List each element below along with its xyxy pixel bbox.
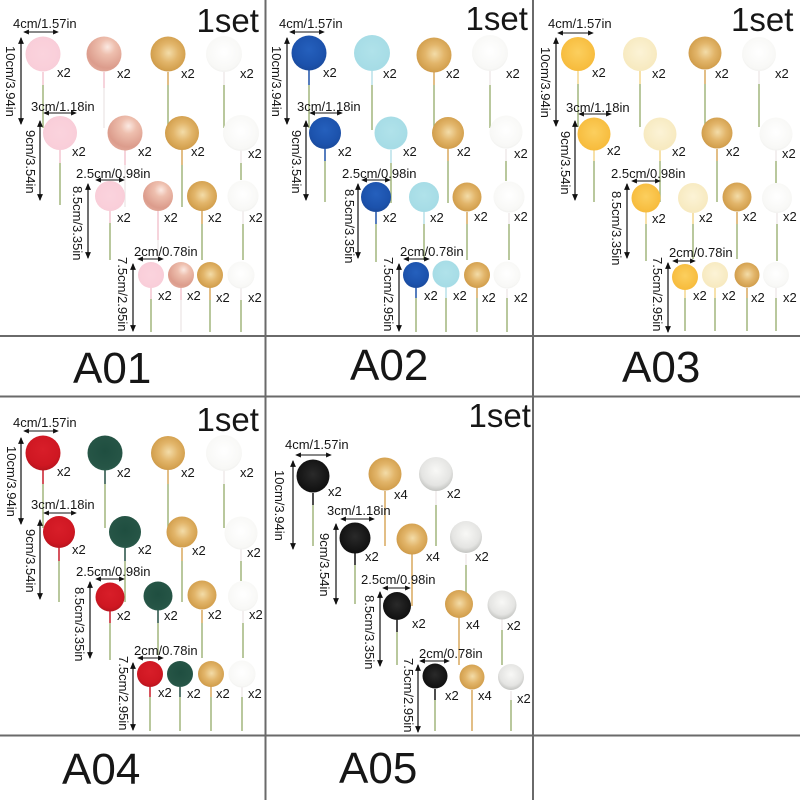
dimensions A04: 2.5cm/0.98in <box>76 564 150 579</box>
dimensions A02 <box>269 16 464 331</box>
balls A01 row 3 <box>95 180 258 212</box>
quantities A01: x2 <box>187 288 201 303</box>
quantities A01: x2 <box>72 144 86 159</box>
stems A02 <box>309 70 416 298</box>
quantities A01: x2 <box>117 210 131 225</box>
quantities A05: x2 <box>517 691 531 706</box>
quantities A05: x4 <box>466 617 480 632</box>
dimensions A04: 9cm/3.54in <box>23 529 38 593</box>
dimensions A02: 2.5cm/0.98in <box>342 166 416 181</box>
quantities A03: x2 <box>715 66 729 81</box>
dimensions A02: 3cm/1.18in <box>297 99 361 114</box>
dimensions A01: 10cm/3.94in <box>3 46 18 117</box>
quantities A01: x2 <box>208 210 222 225</box>
balls A01 row 2 <box>43 115 259 151</box>
quantities A02: x2 <box>403 144 417 159</box>
quantities A01: x2 <box>138 144 152 159</box>
dimensions A05: 7.5cm/2.95in <box>401 658 416 732</box>
panel: A04 <box>4 401 263 794</box>
dimensions A05: 3cm/1.18in <box>327 503 391 518</box>
balls A03 row 3 <box>632 182 792 213</box>
panel: A01 <box>3 2 263 393</box>
balls A04 row 2 <box>43 516 258 550</box>
quantities A04: x2 <box>247 545 261 560</box>
balls A02 row 1 <box>292 35 508 72</box>
quantities A02 <box>323 65 528 305</box>
quantities A03: x2 <box>672 144 686 159</box>
panel: A02 <box>269 0 528 390</box>
quantities A01: x2 <box>248 290 262 305</box>
quantities A05: x2 <box>412 616 426 631</box>
quantities A05: x2 <box>447 486 461 501</box>
quantities A05: x4 <box>394 487 408 502</box>
dimensions A01 <box>3 16 198 331</box>
quantities A02: x2 <box>482 290 496 305</box>
variant label A05: A05 <box>339 744 417 793</box>
quantities A05: x2 <box>507 618 521 633</box>
quantities A05: x2 <box>445 688 459 703</box>
dimensions A05: 9cm/3.54in <box>317 533 332 597</box>
quantities A02: x2 <box>323 65 337 80</box>
dimensions A01: 7.5cm/2.95in <box>115 257 130 331</box>
stems A05 <box>313 493 435 700</box>
dimensions A03: 10cm/3.94in <box>538 47 553 118</box>
set label A01: 1set <box>196 2 259 39</box>
quantities A01: x2 <box>117 66 131 81</box>
variant label A04: A04 <box>62 745 140 794</box>
variant label A03: A03 <box>622 343 700 392</box>
quantities A03: x2 <box>783 290 797 305</box>
dimensions A01: 2cm/0.78in <box>134 244 198 259</box>
quantities A04: x2 <box>208 607 222 622</box>
dimensions A02: 7.5cm/2.95in <box>381 257 396 331</box>
quantities A03: x2 <box>699 210 713 225</box>
quantities A05: x4 <box>478 688 492 703</box>
balls A02 row 4 <box>403 260 520 288</box>
dimensions A05: 4cm/1.57in <box>285 437 349 452</box>
balls A02 row 3 <box>361 182 524 212</box>
dimensions A03 <box>538 16 733 332</box>
quantities A03: x2 <box>782 146 796 161</box>
quantities A01: x2 <box>164 210 178 225</box>
variant label A02: A02 <box>350 341 428 390</box>
quantities A04: x2 <box>138 542 152 557</box>
quantities A04: x2 <box>117 608 131 623</box>
dimensions A03: 2cm/0.78in <box>669 245 733 260</box>
dimensions A01: 3cm/1.18in <box>31 99 95 114</box>
set label A04: 1set <box>196 401 259 438</box>
balls A01 row 4 <box>138 262 254 288</box>
quantities A01: x2 <box>57 65 71 80</box>
quantities A02: x2 <box>514 290 528 305</box>
balls A03 row 2 <box>578 118 792 150</box>
dimensions A03: 4cm/1.57in <box>548 16 612 31</box>
variant label A01: A01 <box>73 344 151 393</box>
dimensions A04: 8.5cm/3.35in <box>72 587 87 661</box>
quantities A04: x2 <box>240 465 254 480</box>
quantities A04: x2 <box>248 686 262 701</box>
quantities A02: x2 <box>383 66 397 81</box>
quantities A04: x2 <box>181 465 195 480</box>
quantities A03: x2 <box>652 211 666 226</box>
quantities A04: x2 <box>216 686 230 701</box>
dimensions A04: 2cm/0.78in <box>134 643 198 658</box>
balls A01 row 1 <box>26 36 242 72</box>
quantities A03: x2 <box>592 65 606 80</box>
quantities A04: x2 <box>249 607 263 622</box>
dimensions A03: 3cm/1.18in <box>566 100 630 115</box>
dimensions A04 <box>4 415 198 730</box>
balls A02 row 2 <box>309 116 522 150</box>
dimensions A05: 10cm/3.94in <box>272 470 287 541</box>
quantities A05 <box>328 484 531 706</box>
quantities A01: x2 <box>216 290 230 305</box>
quantities A01: x2 <box>249 210 263 225</box>
quantities A02: x2 <box>383 210 397 225</box>
quantities A03: x2 <box>743 209 757 224</box>
quantities A04: x2 <box>72 542 86 557</box>
dimensions A02: 10cm/3.94in <box>269 46 284 117</box>
quantities A01: x2 <box>191 144 205 159</box>
quantities A03: x2 <box>607 143 621 158</box>
quantities A01: x2 <box>181 66 195 81</box>
balls A05 row 2 <box>340 521 482 554</box>
dimensions A02: 4cm/1.57in <box>279 16 343 31</box>
dimensions A02: 9cm/3.54in <box>289 130 304 194</box>
quantities A01 <box>57 65 263 305</box>
quantities A01: x2 <box>248 146 262 161</box>
quantities A04: x2 <box>192 543 206 558</box>
dimensions A03: 2.5cm/0.98in <box>611 166 685 181</box>
quantities A02: x2 <box>424 288 438 303</box>
quantities A05: x2 <box>328 484 342 499</box>
dimensions A01: 8.5cm/3.35in <box>70 186 85 260</box>
dimensions A03: 7.5cm/2.95in <box>650 257 665 331</box>
quantities A02: x2 <box>506 66 520 81</box>
quantities A03: x2 <box>751 290 765 305</box>
dimensions A04: 10cm/3.94in <box>4 446 19 517</box>
dimensions A04: 7.5cm/2.95in <box>116 656 131 730</box>
quantities A03: x2 <box>652 66 666 81</box>
balls A05 row 3 <box>383 590 516 620</box>
set label A03: 1set <box>731 1 793 38</box>
quantities A03: x2 <box>726 144 740 159</box>
dimensions A03: 8.5cm/3.35in <box>609 191 624 265</box>
dimensions A02: 8.5cm/3.35in <box>342 189 357 263</box>
quantities A03: x2 <box>693 288 707 303</box>
quantities A01: x2 <box>240 66 254 81</box>
dimensions A04: 3cm/1.18in <box>31 497 95 512</box>
quantities A02: x2 <box>514 146 528 161</box>
stems A03 <box>578 71 715 298</box>
balls A03 row 4 <box>672 262 789 290</box>
set label A02: 1set <box>466 0 528 37</box>
dimensions A03: 9cm/3.54in <box>558 131 573 195</box>
quantities A01: x2 <box>158 288 172 303</box>
balls A04 row 3 <box>96 580 258 612</box>
quantities A03: x2 <box>722 288 736 303</box>
dimensions A04: 4cm/1.57in <box>13 415 77 430</box>
set label A05: 1set <box>468 397 531 434</box>
quantities A04: x2 <box>57 464 71 479</box>
dimensions A05: 2cm/0.78in <box>419 646 483 661</box>
balls A04 row 4 <box>137 660 256 688</box>
stems A01 <box>43 72 181 300</box>
dimensions A05 <box>272 437 483 732</box>
quantities A02: x2 <box>453 288 467 303</box>
dimensions A02: 2cm/0.78in <box>400 244 464 259</box>
dimensions A01: 4cm/1.57in <box>13 16 77 31</box>
quantities A05: x4 <box>426 549 440 564</box>
quantities A03 <box>592 65 797 305</box>
quantities A05: x2 <box>365 549 379 564</box>
quantities A05: x2 <box>475 549 489 564</box>
quantities A02: x2 <box>446 66 460 81</box>
quantities A02: x2 <box>430 210 444 225</box>
quantities A03: x2 <box>775 66 789 81</box>
quantities A02: x2 <box>457 144 471 159</box>
quantities A02: x2 <box>338 144 352 159</box>
balls A05 row 4 <box>422 664 524 690</box>
stems A04 <box>43 470 150 697</box>
dimensions A01: 2.5cm/0.98in <box>76 166 150 181</box>
panel: A05 <box>272 397 531 793</box>
quantities A02: x2 <box>474 209 488 224</box>
dimensions A05: 8.5cm/3.35in <box>362 595 377 669</box>
dimensions A05: 2.5cm/0.98in <box>361 572 435 587</box>
dimensions A01: 9cm/3.54in <box>23 130 38 194</box>
panel: A03 <box>538 1 797 392</box>
quantities A04: x2 <box>187 686 201 701</box>
balls A05 row 1 <box>296 457 453 492</box>
quantities A04: x2 <box>158 685 172 700</box>
quantities A04: x2 <box>117 465 131 480</box>
balls A04 row 1 <box>26 435 242 471</box>
quantities A04 <box>57 464 263 701</box>
quantities A04: x2 <box>164 608 178 623</box>
quantities A03: x2 <box>783 209 797 224</box>
balls A03 row 1 <box>561 36 776 71</box>
quantities A02: x2 <box>514 209 528 224</box>
